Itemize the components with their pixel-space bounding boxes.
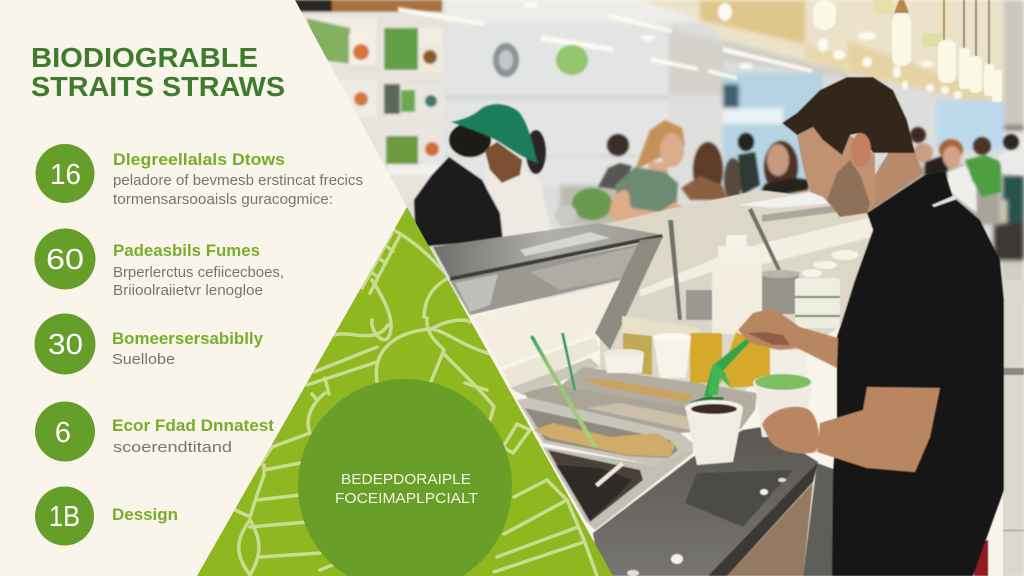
item 2 text: Brperlerctus cefiicecboes, [113,265,284,281]
item 2 text: Padeasbils Fumes [113,242,260,260]
white cup with dark food [685,400,743,465]
number badge 60: 60 [46,244,84,276]
number badge 6 [35,402,95,462]
item 5 text: Dessign [112,506,178,524]
circle label: BEDEPDORAIPLE [341,472,471,488]
item 4 text [112,417,275,456]
plant and jars [572,188,612,220]
man's head [782,77,923,217]
small white tubs on counter [604,333,691,378]
ceiling strip lights [398,2,962,99]
item 3 text: Suellobe [112,352,175,368]
man's arms and hands [738,308,940,472]
item 3 text: Bomeersersabiblly [112,330,264,348]
item 1 text: peladore of bevmesb erstincat frecics [113,173,363,189]
pendant lamps [813,0,1002,102]
yellow food containers [622,316,807,388]
number badge 6: 6 [55,417,71,449]
list item 1 [36,144,363,208]
background: mall interior [280,0,1024,301]
right side crowd [910,127,926,143]
list item 3 [34,314,264,374]
panel: green leaf triangle [197,207,613,576]
shelving with packaged food [290,0,450,202]
item 1 text: tormensarsooaisls guracogmice: [113,192,333,208]
man's shirt [832,172,1004,576]
item 4 text: Ecor Fdad Dnnatest [112,417,275,435]
number badge 30: 30 [48,329,83,361]
list item 5 [35,486,178,546]
number badge 16 [36,144,94,203]
white cup with green lid [753,374,813,437]
leaf line pattern [235,230,597,576]
worker in green cap [414,104,557,247]
wall logos [493,43,588,77]
item 2 text [113,242,284,299]
list item 2 [34,228,284,299]
title [31,42,285,102]
item 1 text: Dlegreellalals Dtows [113,151,285,169]
center circle callout [298,379,512,576]
food trays [517,367,757,530]
list item 4 [35,402,275,462]
chrome containers and jar at back of counter [686,235,840,334]
number badge 1B [35,486,94,546]
background customers [555,120,1024,225]
number badge 30 [34,314,96,374]
man in grey [607,134,629,156]
foreground man in black shirt [738,77,1024,576]
item 3 text [112,330,264,368]
green straws [530,333,750,448]
number badge 60 [34,228,96,290]
white counter back [600,188,880,400]
item 4 text: scoerendtitand [113,440,232,456]
panel: cream text background [0,0,407,576]
woman in green shirt [635,120,685,170]
number badge 1B: 1B [49,501,80,533]
women in queue [693,142,723,198]
sneeze guard glass [433,223,663,395]
circle label: FOCEIMAPLPCIALT [335,491,478,507]
item 2 text: Briioolraiietvr lenogloe [113,283,263,299]
photo: food court serving counter [280,0,1024,576]
title: BIODIOGRABLE [31,42,258,73]
title: STRAITS STRAWS [31,71,285,102]
number badge 16: 16 [50,159,81,191]
item 1 text [113,151,363,208]
granite counter [593,427,836,576]
